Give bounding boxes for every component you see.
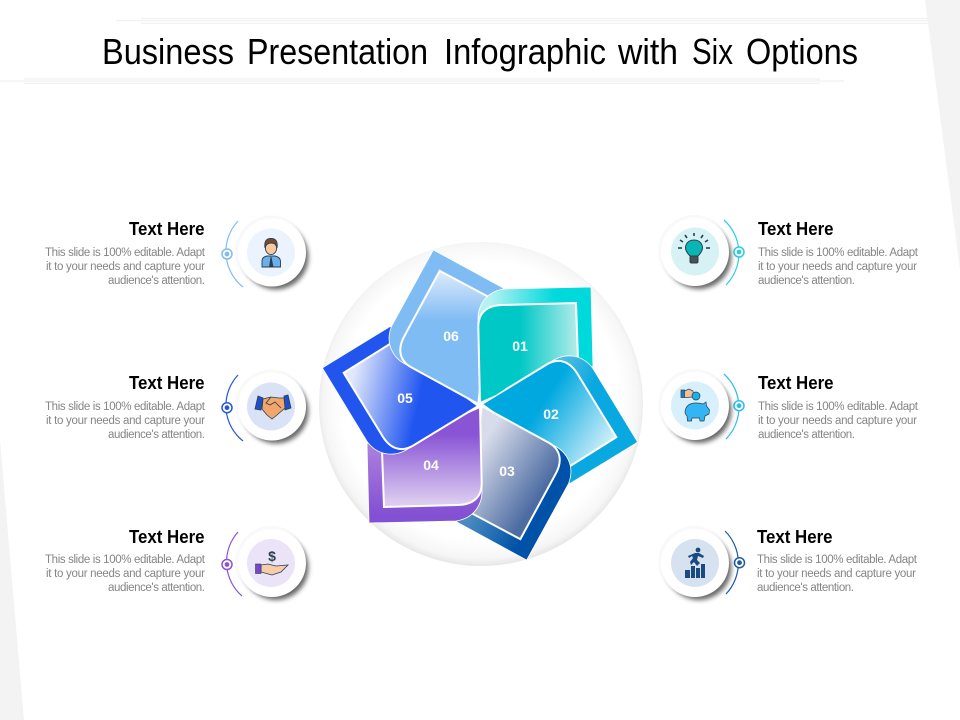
heading: Text Here — [758, 219, 834, 239]
heading: Text Here — [129, 219, 204, 239]
number 02: 02 — [543, 406, 559, 422]
body text — [45, 554, 206, 594]
body text: audience's attention. — [108, 582, 205, 594]
icon: hand with dollar: $ — [268, 548, 276, 564]
icon: hand with dollar — [256, 548, 288, 575]
icon: piggy bank — [681, 389, 710, 421]
icon disc — [235, 216, 308, 290]
arc connector — [222, 375, 243, 441]
petal 06 — [377, 248, 536, 407]
body text — [45, 401, 206, 441]
heading: Text Here — [129, 373, 204, 393]
body text: This slide is 100% editable. Adapt — [45, 401, 206, 413]
icon disc — [235, 370, 308, 444]
number 05: 05 — [397, 390, 413, 406]
icon disc — [658, 215, 732, 289]
petal 03 — [424, 403, 583, 562]
right item 2 — [658, 369, 919, 443]
body text: audience's attention. — [108, 429, 205, 441]
body text — [757, 554, 918, 594]
body text: This slide is 100% editable. Adapt — [45, 247, 206, 259]
heading: Text Here — [758, 373, 834, 393]
background: right corner shape — [925, 0, 960, 270]
arc connector — [724, 220, 744, 285]
body text: it to your needs and capture your — [758, 261, 917, 273]
body text: it to your needs and capture your — [46, 568, 205, 580]
right item 1 — [658, 215, 919, 289]
right item 3 — [658, 526, 918, 600]
body text — [758, 247, 919, 287]
number 01: 01 — [512, 338, 528, 354]
body text: it to your needs and capture your — [757, 568, 916, 580]
icon: light bulb — [678, 233, 710, 263]
title: Options — [746, 31, 858, 72]
body text: audience's attention. — [758, 429, 855, 441]
number 06: 06 — [443, 328, 459, 344]
title: Infographic — [444, 31, 606, 72]
arc connector — [222, 221, 243, 287]
body text: audience's attention. — [108, 275, 205, 287]
number 03: 03 — [499, 463, 515, 479]
title: with — [617, 31, 678, 72]
petal 04 — [367, 405, 482, 523]
body text: audience's attention. — [757, 582, 854, 594]
title: Presentation — [247, 31, 428, 72]
background: left corner shape — [0, 440, 24, 720]
title — [102, 31, 858, 72]
arc connector — [222, 532, 242, 596]
body text: audience's attention. — [758, 275, 855, 287]
icon disc — [235, 526, 308, 600]
flower chart — [321, 248, 639, 562]
left item 2 — [45, 370, 308, 444]
icon disc — [658, 369, 732, 443]
background circle — [319, 242, 643, 566]
petal 05 — [321, 307, 481, 466]
title: Six — [692, 31, 733, 72]
petal 01 — [478, 287, 593, 405]
title: Business — [102, 31, 234, 72]
left item 1 — [45, 216, 308, 290]
body text: it to your needs and capture your — [46, 261, 205, 273]
body text: This slide is 100% editable. Adapt — [45, 554, 206, 566]
body text — [45, 247, 206, 287]
body text: This slide is 100% editable. Adapt — [758, 401, 919, 413]
petal 02 — [479, 344, 639, 503]
heading: Text Here — [129, 527, 204, 547]
left item 3 — [45, 526, 308, 600]
icon: handshake — [255, 395, 291, 419]
petal 01 overlap over petal 06 — [477, 288, 505, 405]
icon disc — [658, 526, 732, 600]
icon: runner on bars — [685, 548, 705, 578]
body text: it to your needs and capture your — [46, 415, 205, 427]
body text: This slide is 100% editable. Adapt — [758, 247, 919, 259]
icon: person — [262, 238, 280, 267]
body text: This slide is 100% editable. Adapt — [757, 554, 918, 566]
heading: Text Here — [757, 527, 832, 547]
arc connector — [724, 374, 744, 439]
body text — [758, 401, 919, 441]
number 04: 04 — [423, 457, 439, 473]
body text: it to your needs and capture your — [758, 415, 917, 427]
arc connector — [725, 531, 744, 594]
